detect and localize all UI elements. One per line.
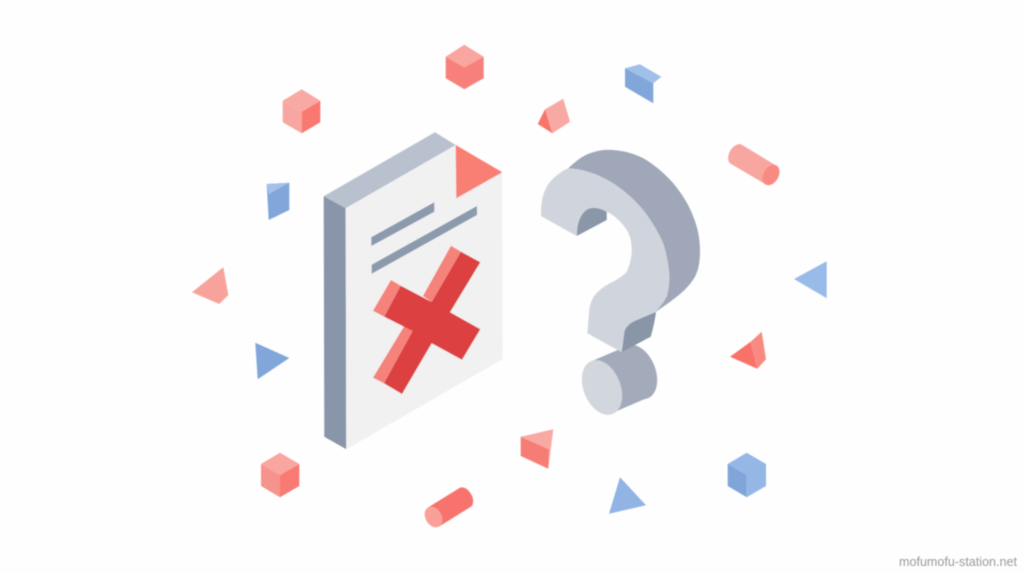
icon: question mark: [541, 150, 700, 421]
icon: document corner triangle: [456, 145, 502, 198]
icon: red pyramid right: [730, 332, 766, 369]
icon: blue triangle right: [794, 261, 827, 298]
icon: blue triangle left: [255, 343, 289, 379]
icon: red cube top left: [283, 89, 320, 133]
question mark side: [568, 150, 700, 312]
document text line 2: [372, 206, 477, 274]
icon: blue prism left: [267, 183, 289, 220]
icon: red cube top: [446, 45, 484, 89]
icon: red cylinder right: [725, 141, 783, 188]
watermark text: mofumofu-station.net: [899, 555, 1018, 569]
icon: red wedge left: [192, 267, 228, 304]
icon: red X mark: [373, 246, 480, 394]
icon: blue wedge top: [625, 64, 661, 103]
icon: red cylinder bottom: [421, 484, 477, 531]
icon: red cube bottom left: [261, 453, 299, 497]
icon: blue cube bottom right: [728, 453, 766, 497]
icon: red prism top: [538, 99, 570, 133]
question mark underside: [622, 312, 656, 352]
question mark dot: [574, 339, 665, 421]
document text line 1: [371, 202, 434, 246]
icon: blue triangle bottom: [609, 477, 646, 514]
question mark front: [541, 168, 669, 352]
icon: red prism bottom: [521, 429, 553, 469]
icon: document with red X: [324, 132, 503, 449]
illustration artwork: [192, 45, 1018, 569]
question mark hook inner: [577, 208, 607, 236]
